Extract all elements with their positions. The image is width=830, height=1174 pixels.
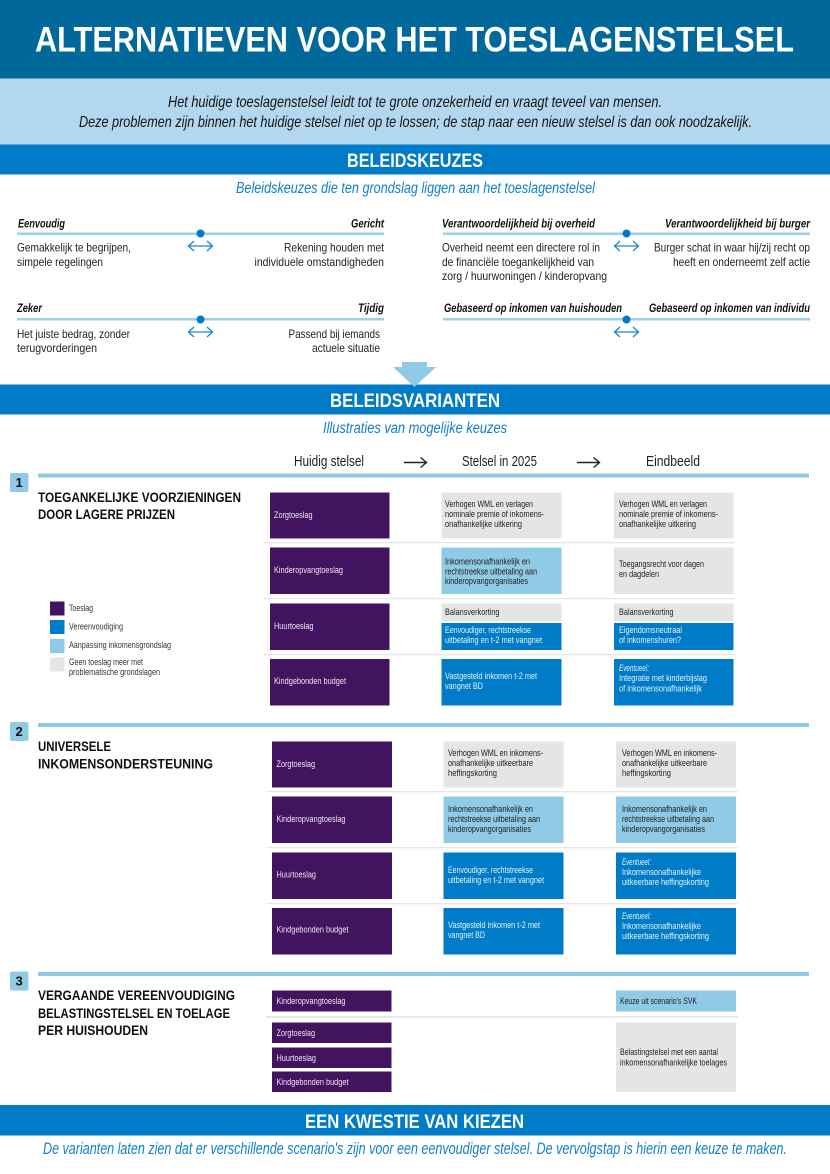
policy choice: eenvoudig versus gericht: simpele regelingen: [17, 255, 103, 269]
heading variant 1: DOOR LAGERE PRIJZEN: [38, 506, 175, 522]
eindbeeld: zorg: [614, 492, 734, 538]
eindbeeld: belastingstelsel: inkomensonafhankelijke toelages: [620, 1058, 727, 1068]
badge 2: [10, 722, 28, 741]
2025: kindgebonden budget: vangnet BD: [448, 930, 485, 940]
eindbeeld: huur balansverkorting: [614, 604, 734, 621]
2025: zorg: [442, 492, 562, 538]
heading: een kwestie van kiezen: EEN KWESTIE VAN KIEZEN: [305, 1112, 524, 1133]
column headers: Eindbeeld: [646, 454, 700, 470]
heading: beleidsvarianten: [0, 384, 830, 414]
2025: kindgebonden budget: Vastgesteld inkomen t-2 met: [448, 920, 540, 930]
panel: variant 3: [10, 972, 809, 1092]
policy choice: zeker versus tijdig: Het juiste bedrag, zonder: [17, 327, 130, 341]
toeslag: kinderopvangtoeslag: Kinderopvangtoeslag: [274, 565, 343, 575]
intro text panel: [0, 78, 830, 144]
toeslag: huurtoeslag: [272, 1048, 392, 1068]
subtitle: beleidsvarianten: Illustraties van mogelijke keuzes: [323, 420, 507, 437]
2025: huur vereenvoudiging: Eenvoudiger, rechtstreekse: [445, 625, 531, 635]
heading: beleidsvarianten: BELEIDSVARIANTEN: [330, 391, 500, 412]
toeslag: zorgtoeslag: [272, 1022, 392, 1043]
eindbeeld: kinderopvang: kinderopvangorganisaties: [622, 824, 705, 834]
eindbeeld: huur vereenvoudiging: of inkomenshuren?: [619, 635, 681, 645]
2025: kindgebonden budget: Vastgesteld inkomen t-2 met: [445, 671, 537, 681]
2025: zorg: [444, 742, 564, 788]
policy choice: eenvoudig versus gericht: Rekening houden met: [284, 240, 385, 254]
eindbeeld: kindgebonden budget: Eventueel:: [622, 911, 651, 921]
policy choice: overheid versus burger: Verantwoordelijkheid bij overheid: [442, 216, 596, 230]
2025: zorg: Verhogen WML en inkomens-: [448, 748, 543, 758]
column headers: [294, 454, 700, 470]
eindbeeld: huur: uitkeerbare heffingskorting: [622, 877, 709, 887]
eindbeeld: kindgebonden budget: uitkeerbare heffingskorting: [622, 931, 709, 941]
eindbeeld: zorg: onafhankelijke uitkeerbare: [622, 758, 707, 768]
eindbeeld: kindgebonden budget: Inkomensonafhankelijke: [622, 921, 701, 931]
legend: Aanpassing inkomensgrondslag: [69, 640, 171, 650]
toeslag: huurtoeslag: Huurtoeslag: [274, 621, 314, 631]
eindbeeld: kindgebonden budget: of inkomensonafhankelijk: [619, 684, 702, 694]
2025: zorg: Verhogen WML en verlagen: [445, 499, 533, 509]
intro text panel: Het huidige toeslagenstelsel leidt tot te grote onzekerheid en vraagt teveel van mensen.: [168, 94, 662, 111]
toeslag: huurtoeslag: Huurtoeslag: [276, 1053, 316, 1063]
policy choice: eenvoudig versus gericht: individuele omstandigheden: [254, 255, 384, 269]
2025: kinderopvang: [444, 796, 564, 843]
2025: zorg: heffingskorting: [448, 768, 497, 778]
eindbeeld: zorg: [616, 742, 736, 788]
2025: kinderopvang: kinderopvangorganisaties: [448, 824, 531, 834]
toeslag: kinderopvangtoeslag: [272, 796, 392, 843]
title banner: [0, 0, 830, 78]
badge 1: 1: [16, 475, 23, 490]
eindbeeld: kindgebonden budget: Eventueel:: [619, 663, 649, 673]
2025: huur: [444, 852, 564, 899]
2025: huur: uitbetaling en t-2 met vangnet: [448, 875, 544, 885]
policy choice: huishouden versus individu: Gebaseerd op inkomen van huishouden: [444, 301, 622, 315]
legend: [50, 602, 171, 677]
toeslag: zorgtoeslag: [272, 742, 392, 788]
subtitle: beleidskeuzes: Beleidskeuzes die ten grondslag liggen aan het toeslagenstelsel: [236, 180, 595, 197]
2025: zorg: nominale premie of inkomens-: [445, 509, 544, 519]
eindbeeld: belastingstelsel: [616, 1022, 736, 1092]
heading: een kwestie van kiezen: [0, 1105, 830, 1136]
arrow: from keuzes to varianten: [393, 362, 436, 387]
toeslag: zorgtoeslag: [270, 492, 390, 538]
heading variant 1: [38, 489, 241, 522]
eindbeeld: kindgebonden budget: Integratie met kinderbijslag: [619, 673, 707, 683]
policy choice: overheid versus burger: [442, 216, 811, 283]
policy choice: zeker versus tijdig: [16, 301, 385, 355]
badge 1: [10, 473, 28, 492]
eindbeeld: huur vereenvoudiging: [614, 623, 734, 650]
policy choice: huishouden versus individu: [443, 301, 811, 337]
policy choice: eenvoudig versus gericht: Eenvoudig: [18, 216, 66, 230]
eindbeeld: kinderopvang: Inkomensonafhankelijk en: [622, 804, 707, 814]
2025: kindgebonden budget: [444, 908, 564, 954]
heading variant 3: BELASTINGSTELSEL EN TOELAGE: [38, 1005, 230, 1021]
policy choice: overheid versus burger: Overheid neemt een directere rol in: [442, 240, 600, 254]
2025: kindgebonden budget: vangnet BD: [445, 681, 483, 691]
policy choice: overheid versus burger: de financiële toegankelijkheid van: [442, 255, 594, 269]
eindbeeld: scenario svk: [616, 990, 736, 1012]
eindbeeld: kinderopvang: Toegangsrecht voor dagen: [619, 559, 704, 569]
2025: huur balansverkorting: [442, 604, 562, 621]
eindbeeld: belastingstelsel: Belastingstelsel met een aantal: [620, 1047, 718, 1057]
eindbeeld: kindgebonden budget: [616, 908, 736, 954]
badge 2: 2: [16, 724, 23, 739]
heading: beleidskeuzes: [0, 144, 830, 174]
policy choice: overheid versus burger: heeft en onderneemt zelf actie: [673, 255, 810, 269]
heading variant 2: [38, 738, 213, 772]
eindbeeld: scenario svk: Keuze uit scenario's SVK: [620, 996, 697, 1006]
eindbeeld: huur vereenvoudiging: Eigendomsneutraal: [619, 625, 682, 635]
toeslag: kindgebonden budget: [272, 908, 392, 954]
2025: zorg: onafhankelijke uitkeerbare: [448, 758, 533, 768]
2025: kinderopvang: kinderopvangorganisaties: [445, 576, 528, 586]
policy choice: zeker versus tijdig: Tijdig: [358, 301, 385, 315]
column headers: Stelsel in 2025: [462, 454, 537, 470]
legend: Toeslag: [69, 603, 93, 613]
toeslag: huurtoeslag: [270, 604, 390, 650]
eindbeeld: kinderopvang: en dagdelen: [619, 569, 659, 579]
eindbeeld: zorg: onafhankelijke uitkering: [619, 519, 696, 529]
eindbeeld: kindgebonden budget: [614, 659, 734, 706]
toeslag: zorgtoeslag: Zorgtoeslag: [276, 759, 315, 769]
eindbeeld: zorg: nominale premie of inkomens-: [619, 509, 718, 519]
policy choice: zeker versus tijdig: Zeker: [16, 301, 43, 315]
badge 3: [10, 972, 28, 990]
legend: Vereenvoudiging: [69, 622, 123, 632]
policy choice: zeker versus tijdig: terugvorderingen: [17, 341, 97, 355]
heading variant 3: PER HUISHOUDEN: [38, 1022, 148, 1038]
legend: Geen toeslag meer met: [69, 657, 143, 667]
2025: kinderopvang: [442, 548, 562, 594]
policy choice: overheid versus burger: zorg / huurwoningen / kinderopvang: [442, 269, 607, 283]
toeslag: huurtoeslag: [272, 852, 392, 899]
toeslag: zorgtoeslag: Zorgtoeslag: [276, 1028, 315, 1038]
toeslag: kinderopvangtoeslag: [272, 990, 392, 1012]
policy choice: eenvoudig versus gericht: Gemakkelijk te begrijpen,: [17, 240, 131, 254]
toeslag: kindgebonden budget: [272, 1072, 392, 1092]
toeslag: kindgebonden budget: [270, 659, 390, 706]
eindbeeld: zorg: Verhogen WML en inkomens-: [622, 748, 717, 758]
heading variant 3: [38, 987, 235, 1038]
eindbeeld: kinderopvang: [614, 548, 734, 594]
badge 3: 3: [16, 974, 23, 988]
2025: huur: Eenvoudiger, rechtstreekse: [448, 865, 533, 875]
eindbeeld: huur: [616, 852, 736, 899]
toeslag: kinderopvangtoeslag: [270, 548, 390, 594]
toeslag: huurtoeslag: Huurtoeslag: [276, 870, 316, 880]
eindbeeld: huur: Inkomensonafhankelijke: [622, 867, 701, 877]
toeslag: kinderopvangtoeslag: Kinderopvangtoeslag: [276, 814, 346, 824]
heading variant 2: INKOMENSONDERSTEUNING: [38, 756, 213, 772]
policy choice: eenvoudig versus gericht: [17, 216, 385, 269]
2025: kinderopvang: Inkomensonafhankelijk en: [445, 556, 530, 566]
policy choice: eenvoudig versus gericht: Gericht: [351, 216, 385, 230]
eindbeeld: kinderopvang: rechtstreekse uitbetaling aan: [622, 814, 714, 824]
eindbeeld: kinderopvang: [616, 796, 736, 843]
panel: variant 2: [10, 722, 809, 954]
eindbeeld: huur balansverkorting: Balansverkorting: [619, 607, 674, 617]
column headers: Huidig stelsel: [294, 454, 364, 470]
heading: beleidskeuzes: BELEIDSKEUZES: [347, 151, 483, 172]
heading variant 1: TOEGANKELIJKE VOORZIENINGEN: [38, 489, 241, 505]
2025: huur balansverkorting: Balansverkorting: [445, 607, 500, 617]
2025: huur vereenvoudiging: [442, 623, 562, 650]
2025: kinderopvang: rechtstreekse uitbetaling aan: [445, 566, 537, 576]
2025: kinderopvang: rechtstreekse uitbetaling aan: [448, 814, 540, 824]
eindbeeld: zorg: Verhogen WML en verlagen: [619, 499, 707, 509]
2025: kindgebonden budget: [442, 659, 562, 706]
2025: kinderopvang: Inkomensonafhankelijk en: [448, 804, 533, 814]
2025: huur vereenvoudiging: uitbetaling en t-2 met vangnet: [445, 635, 542, 645]
legend: problematische grondslagen: [69, 667, 160, 677]
heading variant 3: VERGAANDE VEREENVOUDIGING: [38, 987, 235, 1003]
eindbeeld: zorg: heffingskorting: [622, 768, 671, 778]
toeslag: kindgebonden budget: Kindgebonden budget: [276, 1077, 349, 1087]
toeslag: kinderopvangtoeslag: Kinderopvangtoeslag: [276, 996, 346, 1006]
policy choice: zeker versus tijdig: actuele situatie: [312, 341, 380, 355]
toeslag: kindgebonden budget: Kindgebonden budget: [276, 924, 349, 934]
toeslag: zorgtoeslag: Zorgtoeslag: [274, 510, 312, 520]
heading variant 2: UNIVERSELE: [38, 738, 111, 754]
policy choice: zeker versus tijdig: Passend bij iemands: [288, 327, 380, 341]
toeslag: kindgebonden budget: Kindgebonden budget: [274, 676, 346, 686]
2025: zorg: onafhankelijke uitkering: [445, 519, 522, 529]
eindbeeld: huur: Eventueel:: [622, 857, 651, 867]
panel: variant 1: [10, 473, 809, 706]
